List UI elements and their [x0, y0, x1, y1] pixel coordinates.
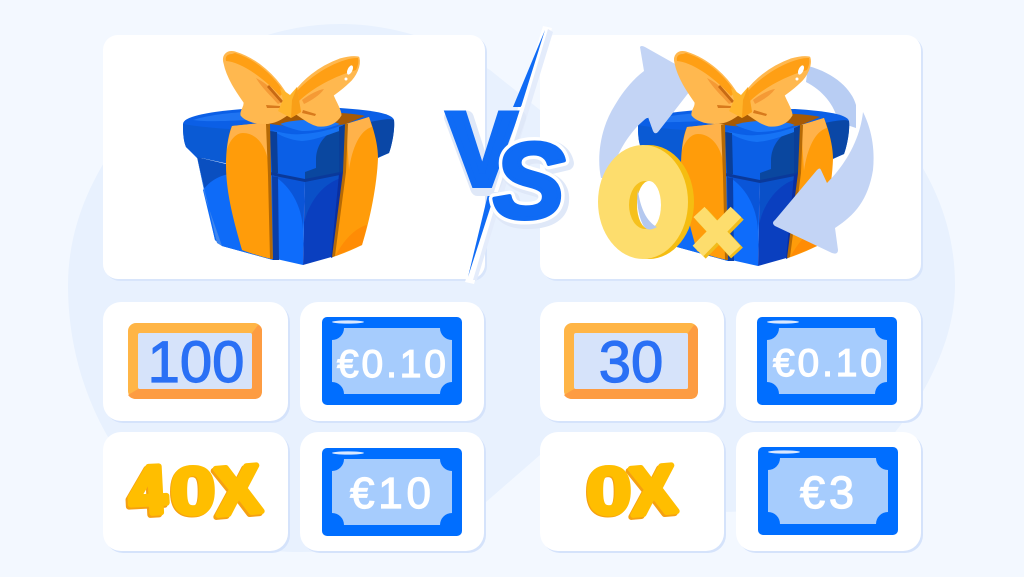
- icon: gift box with refresh arrows and 0x: [598, 46, 874, 266]
- card: 0x: X: [628, 451, 679, 530]
- card: 0x: [540, 432, 726, 553]
- card: €3: €3: [800, 467, 854, 518]
- card: €10: €10: [350, 469, 431, 518]
- card: €0.10 left: €0.10: [337, 343, 446, 386]
- card: 40x: X: [211, 453, 262, 532]
- card: 0x: 0: [585, 454, 631, 529]
- card: 40x: 0: [169, 454, 215, 529]
- panel: zero wagering bonus: [540, 35, 923, 281]
- icon: gift box: [183, 53, 394, 265]
- versus mark: S: [496, 123, 568, 244]
- versus mark: V: [447, 92, 517, 208]
- versus mark: [447, 26, 568, 284]
- card: 100 spins: [103, 302, 290, 423]
- panel: standard bonus: [103, 35, 487, 281]
- card: 0x: 0: [586, 453, 632, 528]
- card: 0x: X: [626, 453, 677, 532]
- card: 30 spins: [540, 302, 726, 423]
- background blob: [68, 24, 955, 552]
- card: €0.10 right: €0.10: [773, 342, 882, 385]
- card: €3: [736, 432, 923, 553]
- card: 40x: [103, 432, 290, 553]
- card: 40x: X: [213, 451, 264, 530]
- versus mark: S: [493, 120, 565, 241]
- card: 30 spins: 30: [599, 330, 663, 395]
- card: 40x: 4: [127, 452, 168, 529]
- card: €0.10 left: [300, 302, 486, 423]
- card: 40x: 0: [170, 453, 216, 528]
- card: 40x: 4: [125, 454, 166, 531]
- vs text: V: [450, 96, 520, 212]
- versus mark: S: [493, 120, 565, 241]
- card: €10: [300, 432, 486, 553]
- card: €0.10 right: [736, 302, 923, 423]
- card: 100 spins: 100: [148, 330, 244, 395]
